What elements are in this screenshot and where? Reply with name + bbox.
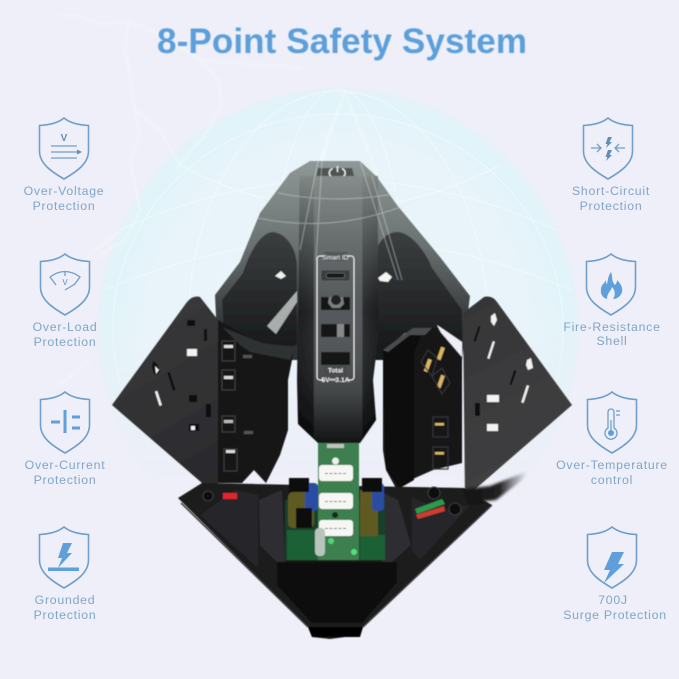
right feature: fire resistance: Fire-Resistance: [563, 320, 661, 334]
left feature: over-load: Protection: [34, 335, 96, 349]
right module top edge: [383, 328, 432, 352]
icon: shield with voltage lines: V: [61, 133, 68, 144]
left feature: grounded: Protection: [34, 608, 96, 622]
right panel socket holes: [474, 313, 533, 431]
right inner arch: [375, 232, 462, 360]
red terminal cap: [223, 493, 237, 499]
left feature: over-current: [25, 392, 105, 487]
left socket panel: [112, 297, 218, 497]
left feature: grounded: [34, 527, 96, 622]
right feature: over-temperature: control: [591, 473, 633, 487]
olive inductors: [288, 490, 378, 536]
central column: [297, 176, 378, 443]
right arch bracket: [385, 333, 430, 350]
power strip product cutaway: [112, 161, 572, 639]
left feature: grounded: Grounded: [35, 593, 95, 607]
right feature: over-temperature: [556, 392, 668, 487]
icon: shield with thermometer: [588, 392, 636, 453]
left feature: over-load: [33, 254, 97, 349]
gap behind right panel: [437, 325, 462, 357]
right feature: surge protection: Surge Protection: [563, 608, 667, 622]
left feature: over-voltage: [24, 118, 104, 213]
protective energy dome: [98, 88, 578, 382]
right feature: surge protection: 700J: [598, 593, 628, 607]
black terminal blocks: [289, 478, 382, 528]
left feature: over-current: Over-Current: [25, 458, 105, 472]
power cable: [465, 471, 528, 503]
left feature: over-current: Protection: [34, 473, 96, 487]
base inner walls: [259, 490, 411, 562]
right feature: over-temperature: Over-Temperature: [556, 458, 668, 472]
right arch fittings: [378, 272, 392, 282]
left feature: over-voltage: Protection: [33, 199, 95, 213]
lightning bolts: [60, 15, 398, 385]
board connector: [327, 444, 344, 448]
left panel socket holes: [152, 320, 211, 431]
left inner arch: [222, 232, 297, 345]
lower PCB glow: [287, 530, 385, 560]
power icon: [329, 166, 345, 178]
left module top face: [222, 327, 296, 360]
right feature: short-circuit: [572, 118, 650, 213]
USB panel: Smart ID: [323, 254, 349, 262]
right socket panel: [463, 297, 572, 498]
left feature: over-voltage: Over-Voltage: [24, 184, 104, 198]
icon: shield with flame: [586, 254, 636, 315]
right feature: surge protection: [563, 527, 667, 622]
mounting posts: [203, 487, 461, 616]
right terminal outlines: [421, 350, 450, 469]
right feature: short-circuit: Protection: [580, 199, 642, 213]
column shading: [297, 176, 378, 443]
base right chamber: [412, 497, 470, 560]
right feature: fire resistance: Shell: [596, 334, 628, 348]
left terminals: [222, 341, 253, 471]
left feature: over-load: Over-Load: [33, 320, 97, 334]
shield glow overlay on cover: [258, 161, 418, 280]
red and green wires: [415, 499, 445, 519]
USB panel: 5V⎓3.1A: [321, 377, 350, 384]
right gold terminals: [424, 347, 445, 454]
right feature: fire resistance: [563, 254, 661, 348]
top cover: [215, 161, 470, 360]
left arch bracket: [267, 291, 297, 334]
icon: shield with large bolt: [588, 527, 636, 588]
left socket module: [218, 320, 295, 483]
icon: shield with grounded bolt: [40, 527, 88, 588]
green control board: [318, 443, 359, 560]
power button block: [314, 168, 358, 197]
icon: shield with gauge: V: [62, 278, 68, 287]
blue capacitors: [305, 483, 384, 511]
base housing: [178, 483, 492, 639]
right module front face: [383, 330, 422, 488]
board components: [315, 512, 357, 556]
board mounting hole: [332, 458, 339, 464]
base rim highlight: [181, 503, 492, 627]
title: 8-Point Safety System: [157, 22, 527, 61]
USB panel: Total: [328, 368, 343, 374]
base left chamber: [200, 490, 258, 568]
right feature: short-circuit: Short-Circuit: [572, 184, 650, 198]
right socket module: [383, 328, 462, 490]
left arch fittings: [275, 271, 286, 279]
USB panel: [317, 252, 354, 384]
base feet: [308, 627, 363, 637]
base bottom well: [277, 562, 397, 623]
icon: shield with arrows and bolts: [584, 118, 632, 179]
white connector strips: [319, 465, 353, 536]
lower PCB: [285, 500, 385, 560]
icon: shield with capacitor symbol: [40, 392, 90, 453]
